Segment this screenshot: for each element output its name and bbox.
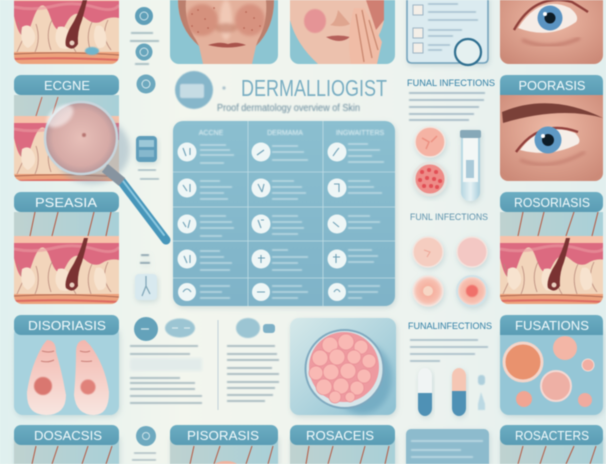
panel: ECGNE: [14, 75, 119, 186]
panel: fungal infections bottom: [408, 321, 492, 416]
panel: ROSACEIS: [290, 425, 395, 464]
POORASIS eye image: [500, 95, 603, 181]
blurred caption: [133, 99, 163, 101]
checklist card: [407, 0, 488, 63]
POORASIS heading: POORASIS: [518, 78, 586, 93]
text column right: [227, 346, 279, 401]
panel: rosacea face: [290, 0, 395, 64]
capsule: white and blue: [418, 368, 432, 416]
column heading: DERMAMA: DERMAMA: [267, 130, 303, 137]
ROSORIASIS heading: ROSORIASIS: [514, 195, 590, 210]
panel: ROSACTERS: [500, 425, 603, 464]
heading: FUNL INFECTIONS: [410, 212, 488, 223]
table icons: [178, 142, 346, 301]
icon: blurred lens: [175, 71, 226, 109]
column heading: ACCNE: ACCNE: [199, 130, 224, 137]
icons row left: [134, 317, 195, 341]
panel: DISORIASIS: [14, 315, 119, 415]
left icon column: [130, 7, 164, 300]
bottom small icon: [132, 426, 156, 460]
icon: second circle: [136, 44, 152, 60]
table background: [173, 121, 395, 306]
panel: culture bowl: [290, 318, 396, 415]
FUSATIONS discs: [500, 325, 603, 415]
column heading: INGWAITTERS: INGWAITTERS: [336, 130, 385, 137]
table icon glyphs: [183, 148, 340, 292]
icon: blue square: [136, 136, 157, 162]
icon: small magnifier: [455, 39, 481, 65]
culture discs: [413, 237, 487, 306]
ROSORIASIS image panel: [500, 212, 605, 306]
subtitle: Proof dermatology overview of Skin: [217, 103, 360, 114]
text lines: [409, 93, 485, 120]
heading: FUNAL INFECTIONS: [407, 78, 495, 88]
panel: POORASIS: [500, 75, 603, 181]
panel: ROSORIASIS: [500, 192, 605, 306]
PSEASIA heading: PSEASIA: [35, 195, 97, 210]
panel: FUSATIONS: [500, 315, 603, 415]
panel: middle text columns: [130, 317, 279, 410]
test tube: [460, 130, 481, 201]
text line: [410, 226, 470, 228]
panel: document card: [407, 0, 488, 65]
disc: lower: [414, 163, 446, 195]
icon: pill block: [135, 255, 157, 300]
table text: [200, 144, 384, 298]
table dividers: [173, 121, 395, 306]
panel: fungal infections top: [407, 78, 495, 201]
icon: third circle: [136, 74, 156, 94]
ROSACEIS heading: ROSACEIS: [306, 428, 374, 443]
icons row right: [236, 318, 275, 338]
FUSATIONS heading: FUSATIONS: [515, 318, 589, 333]
icon: top circle: [135, 7, 153, 25]
disc: upper: [415, 127, 445, 157]
panel: fungal infections middle: [410, 212, 488, 306]
magnifying glass: [43, 100, 166, 240]
DOSACSIS image panel: [14, 435, 119, 464]
PISORASIS heading: PISORASIS: [187, 428, 259, 443]
data table: [173, 121, 395, 306]
panel: acne face: [170, 0, 278, 64]
heading: FUNALINFECTIONS: [408, 321, 492, 331]
vials: [478, 375, 485, 410]
ECGNE heading: ECGNE: [44, 78, 90, 93]
PISORASIS image panel: [170, 435, 278, 464]
ECGNE image panel: [14, 95, 119, 186]
capsule: peach and blue: [452, 368, 466, 416]
text lines: [410, 340, 488, 361]
ROSACTERS heading: ROSACTERS: [515, 428, 589, 443]
panel: PISORASIS: [170, 425, 278, 464]
panel: DOSACSIS: [14, 425, 119, 464]
panel: bottom note card: [406, 429, 489, 464]
faded note: [130, 358, 202, 371]
DISORIASIS heading: DISORIASIS: [28, 318, 106, 333]
DOSACSIS heading: DOSACSIS: [34, 428, 102, 443]
PSEASIA image panel: [14, 212, 119, 306]
ROSACTERS image panel: [500, 435, 603, 464]
panel: top eye: [500, 0, 603, 64]
text column left: [130, 346, 202, 403]
column divider: [217, 320, 219, 410]
ROSACEIS image panel: [290, 435, 395, 464]
small notes: [130, 33, 159, 64]
title: DERMALLIOGIST: [241, 75, 387, 101]
DISORIASIS image: feet: [14, 325, 119, 415]
panel: PSEASIA: [14, 192, 119, 306]
panel: top-left skin cross-section: [14, 0, 119, 64]
title block: [175, 71, 387, 114]
